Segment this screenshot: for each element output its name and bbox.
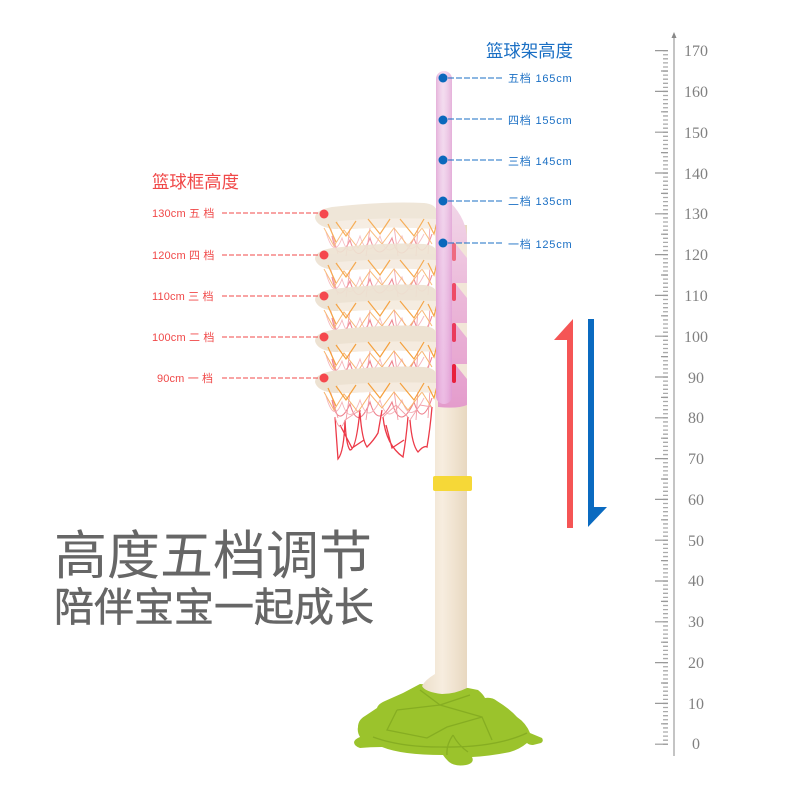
red height labels: 130cm 五 档	[152, 206, 214, 220]
ruler numbers: 110	[684, 288, 708, 305]
ruler numbers: 30	[688, 614, 704, 631]
arrow: down blue	[588, 319, 607, 527]
ruler numbers: 160	[684, 84, 708, 101]
ruler numbers: 20	[688, 655, 704, 672]
bottom red net	[335, 407, 432, 459]
red height labels: 110cm 三 档	[152, 289, 214, 303]
hoop 130cm	[315, 202, 437, 256]
ruler numbers: 60	[688, 492, 704, 509]
red heading: 篮球框高度	[152, 172, 239, 192]
ruler numbers: 10	[688, 696, 704, 713]
ruler numbers: 120	[684, 247, 708, 264]
heading: subtitle: 陪伴宝宝一起成长	[54, 586, 374, 630]
yellow collar	[433, 476, 472, 491]
ruler numbers: 130	[684, 206, 708, 223]
ruler numbers: 100	[684, 329, 708, 346]
red height labels: 120cm 四 档	[152, 248, 214, 262]
pink rear sections	[438, 203, 467, 408]
pole	[422, 225, 467, 694]
blue heading: 篮球架高度	[486, 41, 573, 61]
ruler numbers: 140	[684, 166, 708, 183]
hoop 90cm	[315, 366, 437, 420]
heading: main title: 高度五档调节	[54, 527, 372, 586]
arrow: up red	[554, 319, 573, 528]
blue height labels: 四档 155cm	[508, 113, 572, 127]
ruler numbers: 150	[684, 125, 708, 142]
red height labels: 100cm 二 档	[152, 330, 214, 344]
ruler numbers: 40	[688, 573, 704, 590]
blue height labels: 一档 125cm	[508, 237, 572, 251]
ruler numbers: 80	[688, 410, 704, 427]
ruler numbers: 170	[684, 43, 708, 60]
hoop 110cm	[315, 284, 437, 338]
hoop 100cm	[315, 326, 437, 379]
blue height labels	[438, 71, 572, 251]
hoop 120cm	[315, 244, 437, 297]
red height labels: 90cm 一 档	[157, 371, 213, 385]
pink backboard bar	[436, 71, 452, 404]
blue height labels: 三档 145cm	[508, 154, 572, 168]
turtle base	[354, 684, 543, 766]
blue height labels: 二档 135cm	[508, 194, 572, 208]
ruler numbers: 0	[692, 736, 700, 753]
red height labels	[152, 206, 328, 385]
blue height labels: 五档 165cm	[508, 71, 572, 85]
ruler numbers: 90	[688, 370, 704, 387]
ruler scale	[662, 32, 676, 756]
ruler numbers: 50	[688, 533, 704, 550]
ruler numbers	[684, 43, 708, 753]
hoops and nets	[315, 202, 437, 459]
ruler numbers: 70	[688, 451, 704, 468]
